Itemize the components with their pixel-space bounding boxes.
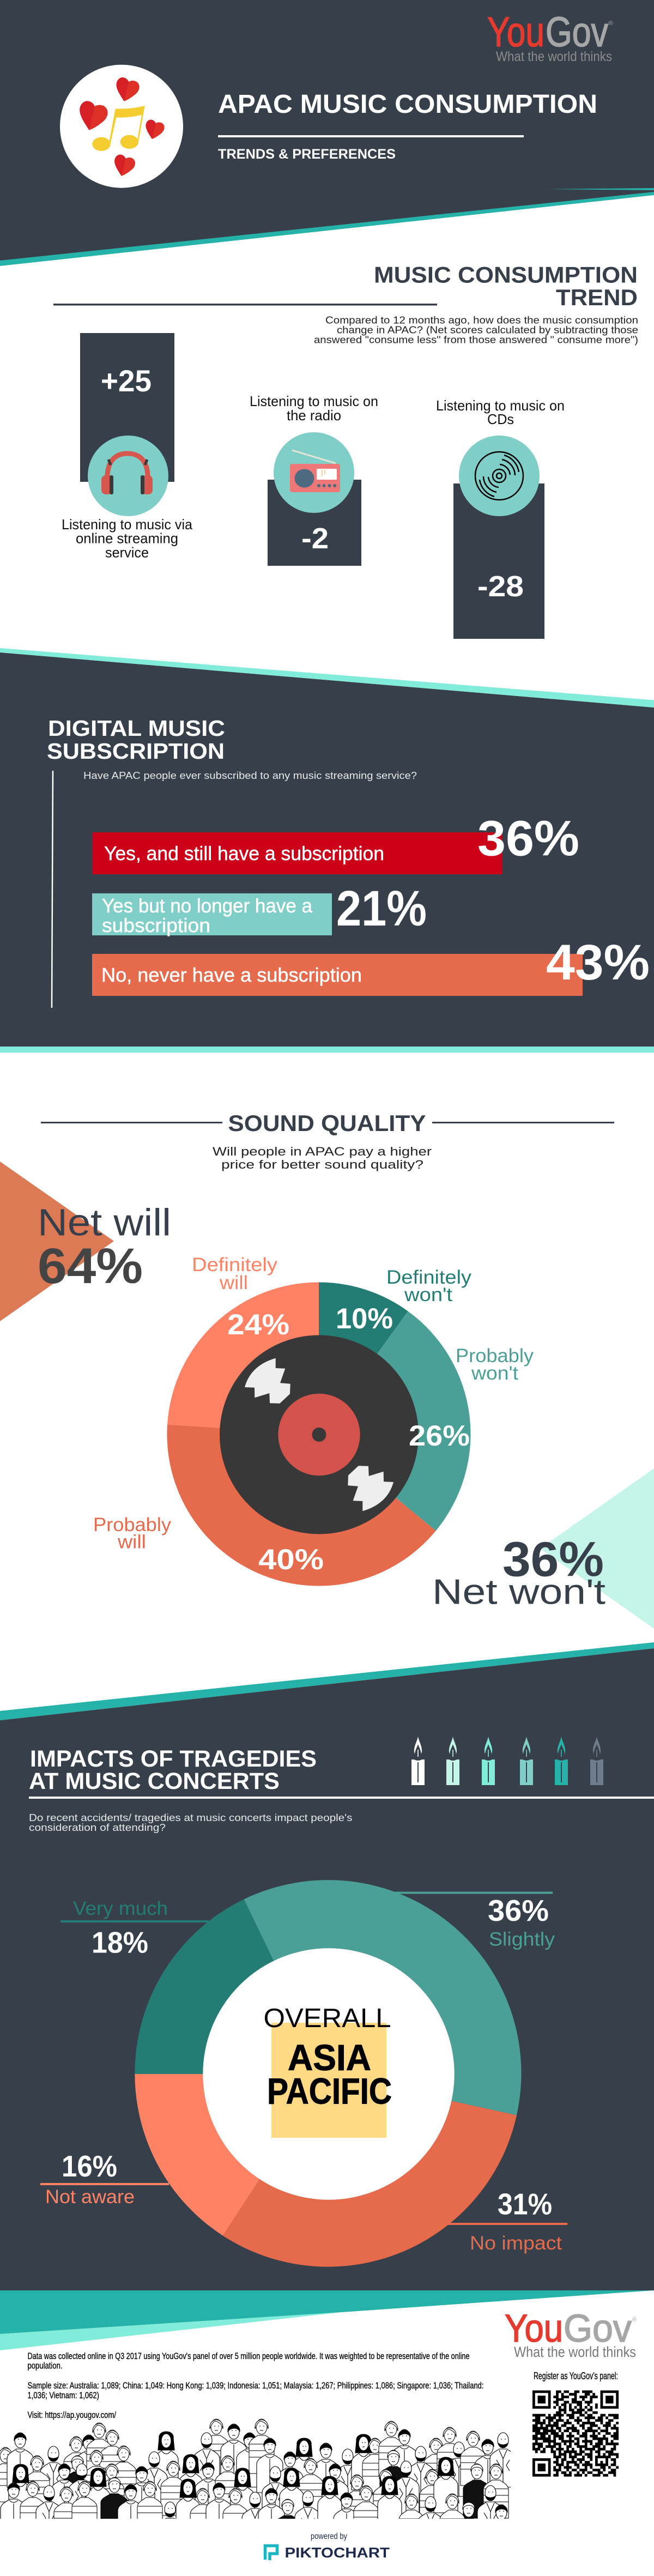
callout: net will: Net will <box>38 1201 171 1244</box>
panel: impacts of tragedies <box>0 1642 654 2290</box>
powered by text: powered by <box>311 2532 347 2541</box>
label <box>62 516 193 560</box>
slice value: 10%: 10% <box>336 1303 393 1335</box>
label: probably will <box>93 1514 172 1552</box>
slice value: 26%: 26% <box>409 1420 470 1452</box>
description <box>314 315 638 346</box>
callout: net will <box>38 1201 171 1294</box>
callout: very much 18% <box>60 1898 209 1959</box>
callout: slightly 36% <box>394 1891 555 1950</box>
bar: still subscribed 36% <box>92 811 579 874</box>
bar: online streaming +25: +25 <box>101 364 152 398</box>
question: price for better sound quality? <box>221 1158 423 1171</box>
label: definitely will: will <box>219 1272 248 1293</box>
donut chart: overall asia pacific <box>135 1880 521 2267</box>
bar: radio -2 <box>250 393 378 566</box>
label: CDs <box>487 411 514 427</box>
label: Listening to music via <box>62 516 193 533</box>
panel: music consumption trend <box>53 262 638 639</box>
label: probably won't: Probably <box>456 1345 534 1366</box>
logo: YouGov: ® <box>608 20 613 27</box>
callout: net won't: Net won't <box>432 1572 605 1611</box>
heading: MUSIC CONSUMPTION <box>374 262 638 288</box>
panel: footer <box>0 2290 654 2561</box>
methodology text: 1,036; Vietnam: 1,062) <box>27 2390 99 2400</box>
label <box>250 393 378 424</box>
methodology text: Data was collected online in Q3 2017 using YouGov's panel of over 5 million people worldwide. It was weighted to be representative of the online <box>27 2351 470 2361</box>
description: change in APAC? (Net scores calculated by subtracting those <box>337 325 638 336</box>
logo: YouGov: What the world thinks <box>496 49 612 64</box>
logo: YouGov: ® <box>632 2317 637 2323</box>
heading: IMPACTS OF TRAGEDIES <box>30 1746 317 1772</box>
icon: headphones <box>101 453 153 494</box>
icon: hearts and music note <box>60 65 183 188</box>
label: definitely won't: won't <box>404 1284 452 1305</box>
bar: no longer subscribed 21%: Yes but no longer have a <box>102 894 313 917</box>
bar: no longer subscribed 21% <box>92 881 427 936</box>
callout: not aware 16% <box>40 2149 169 2208</box>
illustration: crowd of people <box>0 2419 511 2519</box>
question: consideration of attending? <box>29 1822 166 1833</box>
callout: no impact 31%: No impact <box>470 2233 562 2254</box>
logo: YouGov: Gov <box>564 2307 632 2350</box>
centre label: PACIFIC <box>267 2071 392 2112</box>
methodology text: population. <box>27 2360 62 2371</box>
label: probably won't <box>456 1345 534 1384</box>
decorative triangle: net will <box>0 1162 114 1321</box>
heading: SUBSCRIPTION <box>47 739 225 764</box>
methodology text <box>27 2351 484 2420</box>
question: Do recent accidents/ tragedies at music concerts impact people's <box>29 1812 352 1823</box>
question: Have APAC people ever subscribed to any music streaming service? <box>83 770 417 781</box>
question <box>213 1145 432 1171</box>
label: probably will: will <box>117 1532 146 1552</box>
logo: YouGov: You <box>505 2307 563 2350</box>
logo: YouGov <box>505 2307 637 2360</box>
logo: YouGov: Gov <box>546 9 608 56</box>
label: definitely won't <box>386 1267 472 1305</box>
heading: TREND <box>556 285 638 310</box>
bar: CDs -28 <box>436 397 565 639</box>
methodology text: Sample size: Australia: 1,089; China: 1,049: Hong Kong: 1,039; Indonesia: 1,051; Malaysia: 1,267; Philippines: 1,086; Singapore: 1,036; Thailand: <box>27 2380 484 2391</box>
callout: net will: 64% <box>38 1238 143 1294</box>
bar: radio -2: -2 <box>301 522 329 555</box>
heading: AT MUSIC CONCERTS <box>29 1768 280 1794</box>
callout: no impact 31% <box>448 2187 567 2254</box>
panel: header <box>0 0 654 266</box>
label: definitely will <box>192 1254 278 1293</box>
callout: net won't: 36% <box>502 1533 604 1587</box>
methodology text: Visit: https://ap.yougov.com/ <box>27 2410 116 2420</box>
title: APAC MUSIC CONSUMPTION <box>218 90 597 119</box>
bar: CDs -28: -28 <box>477 570 524 603</box>
slice value: 40%: 40% <box>258 1544 324 1576</box>
subtitle: TRENDS & PREFERENCES <box>218 147 396 162</box>
label: probably won't: won't <box>471 1363 518 1384</box>
label: Listening to music on <box>250 393 378 409</box>
decorative triangle: net won't <box>540 1468 654 1629</box>
heading <box>29 1746 317 1794</box>
vinyl record <box>220 1335 419 1534</box>
icon: compact disc <box>475 452 523 500</box>
bar: never subscribed 43%: No, never have a subscription <box>101 964 362 986</box>
qr code <box>532 2391 619 2477</box>
register label: Register as YouGov's panel: <box>534 2371 618 2381</box>
panel: sound quality <box>0 1110 654 1629</box>
callout: slightly 36%: 36% <box>488 1894 549 1927</box>
callout: net won't <box>432 1533 605 1611</box>
question: Will people in APAC pay a higher <box>213 1145 432 1158</box>
centre label: OVERALL <box>264 2004 391 2033</box>
slice value: 24%: 24% <box>227 1309 289 1341</box>
heading: SOUND QUALITY <box>228 1110 426 1136</box>
label: definitely will: Definitely <box>192 1254 278 1275</box>
bar: online streaming +25 <box>62 333 193 560</box>
bar: still subscribed 36%: Yes, and still have a subscription <box>104 842 384 864</box>
label: definitely won't: Definitely <box>386 1267 472 1288</box>
label: the radio <box>287 407 341 424</box>
label: probably will: Probably <box>93 1514 172 1535</box>
heading <box>47 716 225 764</box>
label: service <box>105 544 149 560</box>
centre label <box>264 2004 392 2112</box>
heading <box>41 1110 614 1136</box>
panel: digital music subscription <box>0 648 654 1053</box>
icon: radio <box>290 450 340 492</box>
callout: not aware 16%: Not aware <box>45 2186 135 2208</box>
callout: slightly 36%: Slightly <box>489 1928 555 1950</box>
logo: YouGov: You <box>487 9 544 56</box>
callout: not aware 16%: 16% <box>62 2149 117 2183</box>
logo: YouGov: What the world thinks <box>514 2344 636 2360</box>
logo: Piktochart: PIKTOCHART <box>284 2544 390 2561</box>
question <box>29 1812 352 1833</box>
description: answered "consume less" from those answered " consume more") <box>314 335 638 346</box>
bar: never subscribed 43%: 43% <box>546 935 650 990</box>
label: online streaming <box>76 530 178 546</box>
callout: no impact 31%: 31% <box>498 2187 552 2221</box>
callout: very much 18%: 18% <box>92 1925 148 1959</box>
heading: DIGITAL MUSIC <box>48 716 225 741</box>
description: Compared to 12 months ago, how does the music consumption <box>325 315 638 326</box>
bar: no longer subscribed 21%: subscription <box>102 914 210 936</box>
label: Listening to music on <box>436 397 565 414</box>
bar: never subscribed 43% <box>92 935 650 996</box>
callout: very much 18%: Very much <box>73 1898 168 1919</box>
icon: candles <box>411 1737 603 1785</box>
label <box>436 397 565 427</box>
centre label: ASIA <box>288 2037 371 2078</box>
bar: still subscribed 36%: 36% <box>477 811 579 867</box>
heading <box>374 262 638 310</box>
bar: no longer subscribed 21%: 21% <box>336 881 427 936</box>
logo: YouGov <box>487 9 613 64</box>
donut chart with vinyl record <box>167 1282 470 1586</box>
